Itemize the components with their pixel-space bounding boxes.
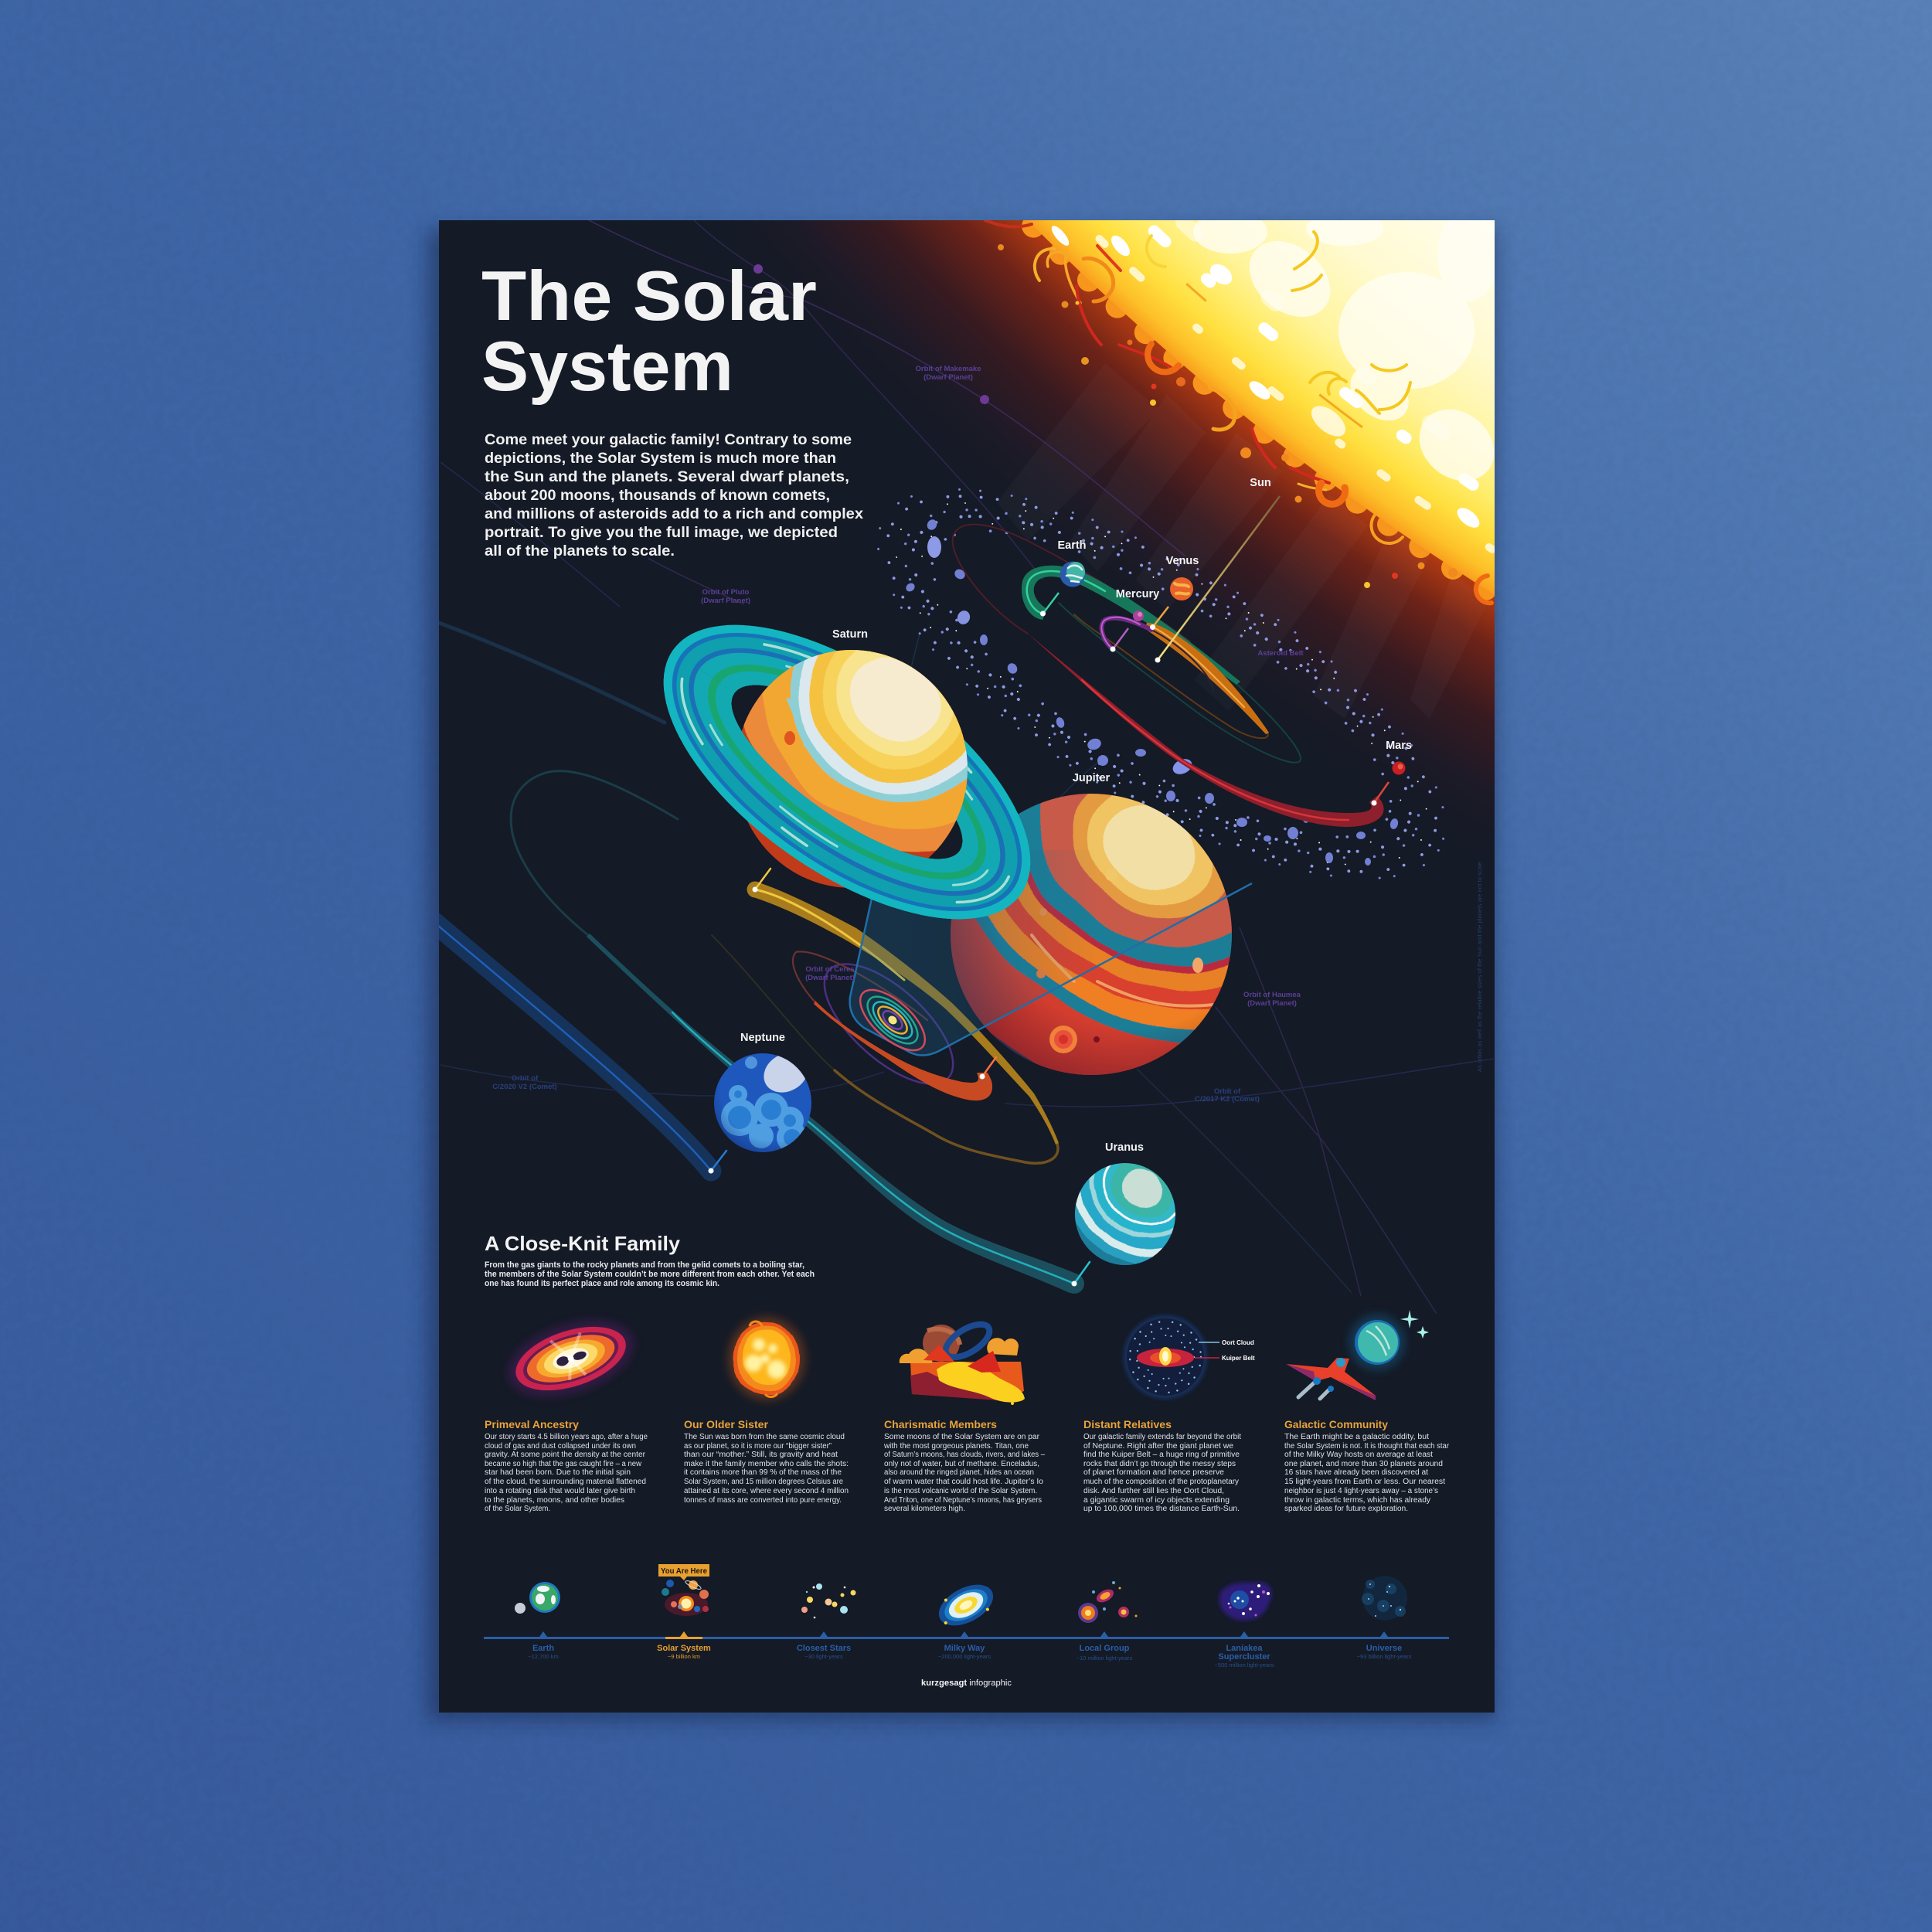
scale timeline labels: ~30 light-years [804,1653,843,1660]
orbit labels: C/2017 K2 (Comet) [1195,1095,1260,1104]
column: Charismatic Members: Charismatic Members [884,1419,997,1430]
Earth with leader [1040,561,1085,617]
inset: inner solar system zoom [850,850,1252,1061]
orbit of Uranus [511,771,1090,1294]
column: Charismatic Members [883,1419,1045,1513]
orbit of Mercury [1101,617,1213,692]
orbit labels: (Dwarf Planet) [701,597,750,605]
column: Our Older Sister: as our planet, so it is more our “bigger sister” [684,1442,832,1451]
column: Distant Relatives: Our galactic family extends far beyond the orbit [1083,1433,1241,1441]
introduction text: depictions, the Solar System is much more than [485,450,836,467]
introduction text: the Sun and the planets. Several dwarf planets, [485,468,849,485]
orbit of Jupiter [793,951,996,1100]
column: Distant Relatives [1083,1419,1241,1513]
Mars with leader [1371,762,1405,805]
column: Primeval Ancestry: cloud of gas and dust collapsed under its own [485,1442,636,1451]
column: Primeval Ancestry [485,1419,648,1513]
column: Galactic Community: neighbor is just 4 light-years away – a stone’s [1284,1487,1438,1495]
scale timeline labels: Laniakea [1226,1644,1263,1653]
column: Distant Relatives: rocks that didn’t go through the messy steps [1083,1460,1236,1468]
scale timeline labels: Milky Way [944,1644,985,1653]
column: Distant Relatives: find the Kuiper Belt – a huge ring of primitive [1083,1451,1240,1459]
column: Our Older Sister: tonnes of mass are converted into pure energy. [684,1496,842,1505]
scale timeline labels: ~12,700 km [528,1653,559,1660]
orbit of Earth [1022,566,1301,763]
column: Primeval Ancestry: of the Solar System. [485,1505,550,1513]
planet labels: Jupiter [1073,772,1111,784]
column: Galactic Community: the Solar System is not. It is thought that each star [1284,1442,1450,1451]
scale icon: Laniakea Supercluster [1219,1582,1272,1621]
column: Charismatic Members: also around the ringed planet, hides an ocean [884,1468,1034,1477]
orbit labels: Orbit of [512,1074,539,1083]
column: Our Older Sister: The Sun was born from the same cosmic cloud [684,1433,845,1441]
orbit labels: Orbit of Ceres [805,965,855,974]
faint dwarf planet and comet orbits [440,220,1494,1314]
solar prominences [985,220,1492,603]
scale icon: Solar System with You Are Here flag: You Are Here [661,1567,707,1576]
scale timeline labels: Solar System [657,1644,711,1653]
solar flare dots [998,244,1458,588]
column: Our Older Sister: it contains more than 99 % of the mass of the [684,1468,842,1477]
introduction text: portrait. To give you the full image, we depicted [485,524,838,541]
planet labels: Venus [1166,555,1199,567]
column: Charismatic Members: Some moons of the Solar System are on par [884,1433,1040,1441]
sun leader line [1155,496,1280,663]
rings of Saturn, back half [615,568,1079,976]
column: Primeval Ancestry: gravity. At some point the density at the center [485,1451,646,1459]
column: Charismatic Members: only not of water, but of methane. Enceladus, [884,1460,1039,1468]
orbit labels: (Dwarf Planet) [1247,999,1297,1008]
section heading: A Close-Knit Family: A Close-Knit Family [485,1232,681,1255]
Venus with leader [1150,577,1193,630]
orbit of Mars [953,525,1384,827]
column: Distant Relatives: much of the composition of the protoplanetary [1083,1478,1239,1486]
column: Galactic Community: of the Milky Way hosts on average at least [1284,1451,1433,1459]
scale timeline labels: ~93 billion light-years [1357,1653,1412,1660]
orbit labels: Orbit of Makemake [915,365,981,373]
title: The Solar [481,257,817,335]
column: Primeval Ancestry: became so high that the gas caught fire – a new [485,1460,642,1468]
scale icon: Local Group [1078,1581,1138,1623]
sun body [1022,220,1495,600]
planet: Jupiter [747,455,1553,1237]
scale timeline labels: Local Group [1080,1644,1130,1653]
column: Primeval Ancestry: star had been born. Due to the initial spin [485,1468,631,1477]
column: Our Older Sister: make it the family member who calls the shots: [684,1460,849,1468]
icon: Oort cloud and Kuiper belt [1124,1315,1255,1399]
column: Distant Relatives: up to 100,000 times the distance Earth-Sun. [1083,1505,1240,1513]
asteroid belt [877,488,1445,879]
Mercury with leader [1110,611,1144,652]
orbit labels: Asteroid Belt [1257,649,1304,658]
section intro text: the members of the Solar System couldn’t be more different from each other. Yet each [485,1270,815,1279]
orbit labels: Orbit of [1214,1087,1241,1096]
column: Galactic Community: 16 stars have already been discovered at [1284,1468,1428,1477]
icon: young sun [728,1317,805,1400]
planet labels: Uranus [1105,1141,1144,1154]
planet: Saturn [676,484,1117,915]
orbit of Ceres [805,944,972,1104]
credit: kurzgesagt infographic: kurzgesagt infographic [921,1679,1012,1688]
scale timeline labels: ~500 million light-years [1215,1662,1274,1668]
vertical side note: As orbits as well as the relative sizes of the Sun and the planets are not to scale [1476,862,1483,1072]
scale icon: Closest Stars [801,1583,856,1618]
icon: Makemake dots on orbits [753,264,989,404]
column: Primeval Ancestry: Our story starts 4.5 billion years ago, after a huge [485,1433,648,1441]
scale timeline labels: Universe [1366,1644,1402,1653]
icon: Oort cloud and Kuiper belt: Kuiper Belt [1222,1355,1255,1362]
scale timeline labels: Closest Stars [797,1644,851,1653]
poster [439,220,1495,1713]
column: Galactic Community: Galactic Community [1284,1419,1389,1430]
section intro text [485,1260,815,1288]
column: Distant Relatives: of planet formation and hence preserve [1083,1468,1224,1477]
column: Our Older Sister: attained at its core, where every second 4 million [684,1487,849,1495]
column: Charismatic Members: several kilometers high. [884,1505,965,1513]
column: Our Older Sister [684,1419,849,1505]
planet labels [740,477,1412,1154]
planet labels: Neptune [740,1032,785,1044]
column: Charismatic Members: with the most gorgeous planets. Titan, one [883,1442,1029,1451]
orbit of Saturn [712,869,1059,1163]
orbit labels [492,365,1304,1104]
column: Charismatic Members: of Saturn’s moons, has clouds, rivers, and lakes – [884,1451,1045,1459]
section intro text: one has found its perfect place and role among its cosmic kin. [485,1279,719,1288]
scale timeline labels: Earth [532,1644,554,1653]
planet labels: Saturn [832,628,868,641]
column: Distant Relatives: disk. And further still lies the Oort Cloud, [1083,1487,1224,1495]
column: Charismatic Members: of warm water that could host life. Jupiter’s Io [884,1478,1043,1486]
column: Primeval Ancestry: into a rotating disk that would later give birth [485,1487,635,1495]
introduction text [485,431,863,560]
introduction text: about 200 moons, thousands of known comets, [485,487,830,504]
scale icon: Milky Way [932,1577,1000,1634]
orbit labels: (Dwarf Planet) [805,974,855,982]
planet labels: Earth [1057,539,1087,552]
planet labels: Mars [1386,740,1412,752]
column: Our Older Sister: than our “mother.” Still, its gravity and heat [684,1451,838,1459]
sun glow [785,220,1495,802]
column: Distant Relatives: Distant Relatives [1083,1419,1172,1430]
scale timeline labels: Supercluster [1218,1652,1270,1662]
column: Charismatic Members: is the most volcanic world of the Solar System. [884,1487,1037,1495]
icon: volcanic moon landscape [900,1318,1025,1405]
planet labels: Sun [1250,477,1271,489]
orbit labels: C/2020 V2 (Comet) [492,1083,557,1091]
column: Primeval Ancestry: of the cloud, the surrounding material flattened [485,1478,646,1486]
column: Our Older Sister: Solar System, and 15 million degrees Celsius are [684,1478,843,1486]
scale timeline labels: ~9 billion km [668,1653,700,1660]
poster drop shadow [427,230,1496,1721]
rings of Saturn, front half [615,568,1079,976]
column: Galactic Community: The Earth might be a galactic oddity, but [1284,1433,1429,1441]
column: Charismatic Members: And Triton, one of Neptune’s moons, has geysers [884,1496,1042,1505]
planet labels: Mercury [1116,588,1159,600]
scale timeline axis [484,1631,1449,1639]
orbit labels: (Dwarf Planet) [923,373,973,382]
column: Galactic Community [1284,1419,1450,1513]
column: Galactic Community: throw in galactic terms, which has already [1284,1496,1430,1505]
scale timeline labels: ~10 million light-years [1077,1655,1133,1662]
orbit of Venus [1074,614,1269,738]
planet: Neptune [711,1045,815,1155]
section intro text: From the gas giants to the rocky planets and from the gelid comets to a boiling star, [485,1260,804,1270]
introduction text: all of the planets to scale. [485,543,675,560]
column: Galactic Community: sparked ideas for future exploration. [1284,1505,1408,1513]
scale icon: Universe [1362,1576,1407,1621]
planet: Uranus [1015,1063,1270,1314]
icon: Oort cloud and Kuiper belt: Oort Cloud [1222,1339,1254,1346]
column: Galactic Community: one planet, and more than 30 planets around [1284,1460,1443,1468]
column: Primeval Ancestry: to the planets, moons, and other bodies [485,1496,624,1505]
introduction text: and millions of asteroids add to a rich and complex [485,505,863,522]
introduction text: Come meet your galactic family! Contrary to some [485,431,852,448]
icon: spaceship, exoplanet and stars [1286,1310,1429,1400]
column: Primeval Ancestry: Primeval Ancestry [485,1419,579,1430]
icon: protoplanetary disk [498,1306,643,1411]
column: Galactic Community: 15 light-years from Earth or less. Our nearest [1284,1478,1445,1486]
title: System [481,328,733,406]
scale icon: Earth [515,1582,560,1614]
orbit of Neptune [433,623,726,1173]
orbit labels: Orbit of Pluto [702,588,750,597]
scale timeline labels: ~200,000 light-years [938,1653,991,1660]
column: Our Older Sister: Our Older Sister [684,1419,769,1430]
scale timeline labels [528,1644,1412,1668]
sun rays [997,363,1488,719]
column: Distant Relatives: of Neptune. Right after the giant planet we [1083,1442,1233,1451]
title [481,257,817,406]
column: Distant Relatives: a gigantic swarm of icy objects extending [1083,1496,1230,1505]
orbit labels: Orbit of Haumea [1243,991,1301,999]
scale icon: Solar System with You Are Here flag [658,1564,709,1616]
